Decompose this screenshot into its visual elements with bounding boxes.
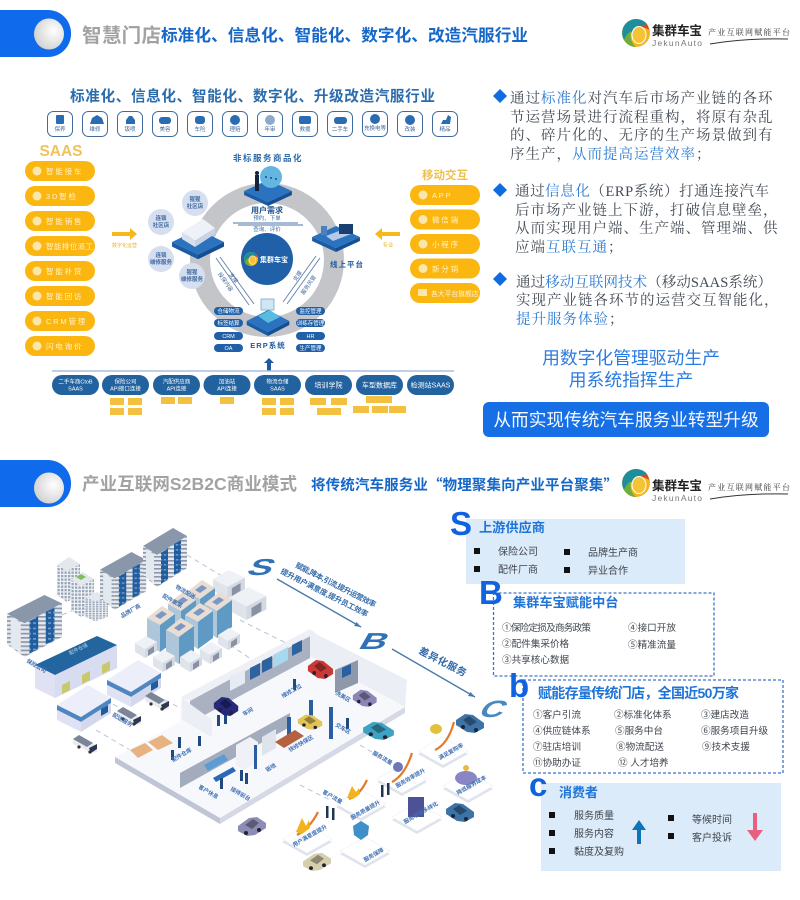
SAAS pills column: 智能销售 [46, 216, 83, 226]
SAAS pills column [25, 161, 95, 356]
ring diagram: 支撑 [227, 271, 240, 285]
panel: B empowerment platform [479, 574, 714, 676]
ring: ERP node [247, 299, 289, 350]
ring diagram [148, 153, 364, 352]
bullet: standardization: 的、碎片化的、无序的生产场景做到有 [510, 126, 774, 144]
ring: store node with community bubbles [148, 190, 224, 289]
panel: c consumers: 服务质量 [574, 809, 614, 822]
slogan: 用数字化管理驱动生产 [542, 348, 720, 368]
header 2: title: 产业互联网S2B2C商业模式 [82, 474, 298, 494]
bullet: mobile internet: 实现产业链各环节的运营交互智能化， [516, 291, 780, 309]
service icons row: 钣喷 [124, 125, 136, 133]
service icons row: 维修 [89, 125, 101, 133]
header 1: logo [622, 19, 790, 48]
illustration: isometric S2B2C scene: 满足复购率 [437, 741, 465, 762]
bullet: mobile internet: ； [609, 312, 624, 328]
panel: b existing stores: ⑫ 人才培养 [618, 757, 669, 769]
dashed flow lines [62, 555, 385, 800]
slogan [542, 348, 720, 390]
bullet: standardization: 序生产， [510, 146, 572, 163]
SAAS pills column: 智能回访 [46, 291, 83, 301]
bottom integration pills: 汽配供应商 [163, 378, 191, 386]
ring: store node with community bubbles: 社区店 [153, 221, 170, 229]
panel: S upstream suppliers: 品牌生产商 [588, 546, 638, 559]
panel: S upstream suppliers [450, 505, 685, 584]
ring diagram: 支撑 [291, 269, 304, 283]
ring diagram: 非标服务商品化 [233, 153, 303, 163]
service icons row: 精品 [439, 125, 451, 133]
iso labels: 维修工位 [280, 682, 303, 700]
iso labels: 服务流量 [371, 749, 394, 767]
iso labels: 保险公司 [25, 657, 48, 675]
panel: smart store diagram [25, 87, 480, 415]
warehouse: 配件仓储 [68, 642, 89, 657]
ring: ERP module pills: 标签结算 [217, 319, 240, 327]
ring: user demand node: 用户需求 [251, 205, 283, 215]
panel: b existing stores: b [509, 667, 529, 704]
bottom integration pills: 车型数据库 [362, 380, 397, 390]
arrow: SAAS to platform [112, 228, 137, 249]
panel: b existing stores: ⑪协助办证 [533, 757, 581, 769]
partner chips [110, 396, 406, 415]
panel: b existing stores: ⑦驻店培训 [533, 741, 581, 753]
panel: B empowerment platform: ④接口开放 [628, 622, 676, 634]
panel: b existing stores: ⑥服务项目升级 [701, 725, 769, 737]
arrow S to B: 赋能,降本,引流,提升运营效率 [294, 560, 378, 609]
header 2: logo [622, 469, 790, 503]
iso labels: 客户休息 [197, 783, 220, 801]
bottom integration pills [52, 375, 454, 395]
ring: ERP module pills [214, 307, 325, 352]
arrow B to C [392, 644, 475, 697]
header 2: blue tab icon [0, 460, 71, 507]
ring diagram: 服务风管 [299, 273, 318, 296]
panel: B empowerment platform: ①保险定损及商务政策 [502, 622, 591, 634]
service icons row: 车险 [194, 125, 206, 133]
ring: centre logo [241, 233, 293, 285]
illustration: isometric S2B2C scene: 用户满意度提升 [291, 822, 329, 849]
ring: store node with community bubbles: 连锁 [155, 251, 167, 259]
ring: ERP module pills: 生产管理 [299, 344, 322, 352]
ring: ERP module pills: HR [307, 334, 314, 340]
header 2: title [82, 474, 618, 495]
mobile pills column [410, 185, 480, 303]
towers: warehouse cluster [135, 580, 240, 672]
iso labels: 配送服务 [111, 711, 134, 729]
buildings: suppliers [7, 528, 266, 657]
panel: right explanation text [483, 89, 780, 437]
bottom integration pills: API接口连接 [110, 384, 141, 392]
panel: b existing stores: ①客户引流 [533, 709, 581, 721]
panel: B empowerment platform: B [479, 574, 503, 611]
bottom integration pills: API连接 [217, 384, 237, 392]
service icons row [48, 112, 458, 136]
icon: down arrow [747, 813, 763, 841]
mobile pills column: 微信端 [432, 214, 460, 224]
illustration: isometric S2B2C scene: 服务效率提升 [394, 766, 427, 790]
header 1: logo: JekunAuto [652, 38, 702, 48]
bullet: standardization [493, 89, 774, 163]
bullet: mobile internet: 通过移动互联网技术（移动SAAS系统） [516, 274, 773, 291]
illustration: isometric S2B2C scene: 服务保障 [362, 846, 385, 864]
iso labels: 洗美区 [334, 689, 353, 704]
bullet: informatization: 通过信息化（ERP系统）打通连接汽车 [515, 183, 770, 200]
diagram title: 标准化、信息化、智能化、数字化、升级改造汽服行业 [70, 87, 435, 105]
panel: b existing stores: ③建店改造 [701, 709, 749, 721]
S B C letters [242, 554, 513, 722]
panel: B empowerment platform: ③共享核心数据 [502, 654, 570, 666]
service icons row: 改装 [404, 125, 416, 133]
ring diagram: 投保内容 [216, 271, 236, 294]
trucks [73, 692, 169, 754]
mobile interaction heading: 移动交互 [422, 168, 468, 182]
bullet: informatization [493, 183, 778, 256]
illustration: isometric S2B2C scene: 服务项目多样化 [402, 799, 440, 826]
bullet: informatization: 从而实现用户端、生产端、管理端、供 [515, 220, 778, 237]
mobile pills column: APP [432, 191, 452, 200]
ring: user demand node: 预约、下单 [253, 214, 281, 222]
header 2: logo: 产业互联网赋能平台 [708, 482, 790, 493]
iso labels: 品牌厂商 [119, 602, 142, 620]
illustration: isometric S2B2C scene [7, 528, 513, 871]
iso labels: 接待前台 [229, 785, 252, 803]
panel: c consumers [529, 766, 781, 871]
S B C letters: S [242, 554, 282, 580]
mobile pills column: 小程序 [432, 239, 460, 249]
arrow: mobile to platform [375, 228, 400, 249]
iso labels: 客户流量 [321, 788, 344, 806]
ring: ERP node: ERP系统 [250, 340, 286, 350]
arrow: mobile to platform: 专业 [382, 241, 394, 249]
ring: centre logo: 集群车宝 [260, 255, 288, 264]
panel: b existing stores: 赋能存量传统门店，全国近50万家 [538, 685, 739, 701]
mobile pills column: 各大平台旗舰店 [431, 289, 479, 298]
stores [57, 660, 161, 732]
ring: ERP module pills: 训练存管理 [297, 319, 325, 327]
service icons row: 二手车 [332, 125, 349, 133]
panel: b existing stores: ②标准化体系 [614, 709, 672, 721]
header 1: logo: 集群车宝 [652, 23, 702, 38]
arrow: SAAS to platform: 数字化运营 [112, 242, 137, 249]
SAAS pills column: 3D智检 [46, 191, 78, 201]
panel: c consumers: c [529, 766, 547, 803]
header 2: title: 将传统汽车服务业“物理聚集向产业平台聚集” [311, 474, 618, 495]
panel: S upstream suppliers: S [450, 505, 472, 542]
ring: online platform node: 线上平台 [330, 259, 364, 269]
arrow S to B: 提升用户满意度,提升员工效率 [279, 566, 371, 619]
SAAS pills column: 智能补货 [46, 266, 83, 276]
bullet: standardization: 标准化对汽车后市场产业链的各环 [541, 91, 774, 107]
panel: B empowerment platform: ⑤精准流量 [628, 639, 676, 651]
ring: user demand node [233, 166, 303, 233]
SAAS pills column: 闪电询价 [46, 341, 83, 351]
icon: up arrow [632, 820, 646, 844]
panel: S upstream suppliers: 异业合作 [588, 564, 628, 577]
arrow: bottom bar up to ERP [264, 358, 274, 371]
header 1: title: 标准化、信息化、智能化、数字化、改造汽服行业 [161, 25, 528, 45]
ring: store node with community bubbles: 猩猩 [186, 268, 198, 276]
SAAS pills column: CRM管理 [46, 316, 87, 326]
ring: ERP module pills: 仓储物流 [217, 307, 240, 315]
panel: b existing stores: ④供应链体系 [533, 725, 591, 737]
header 2: logo: 集群车宝 [652, 478, 702, 493]
panel: b existing stores: ⑧物流配送 [616, 741, 664, 753]
panel: B empowerment platform: ②配件集采价格 [502, 638, 570, 650]
SAAS heading: SAAS [39, 143, 83, 160]
arrow S to B [277, 560, 378, 627]
ring: ERP module pills: CRM [222, 334, 235, 340]
panel: c consumers: 客户投诉 [692, 831, 732, 844]
SAAS pills column: 智能排位派工 [46, 241, 93, 251]
SAAS pills column: 智能接车 [46, 166, 83, 176]
S B C letters: C [474, 696, 513, 722]
workshop floor [115, 629, 407, 824]
panel: c consumers: 等候时间 [692, 813, 732, 826]
arrow B to C: 差异化服务 [417, 644, 469, 679]
bottom integration pills: SAAS [68, 386, 83, 392]
iso labels: 物流配送 [174, 583, 197, 601]
bottom integration pills: 培训学院 [314, 380, 342, 390]
ring: store node with community bubbles: 维修服务 [150, 258, 172, 266]
iso labels [25, 583, 394, 806]
ring: store node with community bubbles: 连锁 [155, 214, 167, 222]
ring: support lines [216, 256, 320, 305]
panel: S upstream suppliers: 保险公司 [498, 545, 538, 558]
mobile pills column: 新分销 [432, 264, 460, 274]
illustration: isometric S2B2C scene: 降低服务成本 [455, 773, 488, 797]
iso labels: 配件仓库 [170, 746, 193, 764]
ring: store node with community bubbles: 猩猩 [189, 195, 201, 203]
service icons row: 理赔 [229, 125, 241, 133]
bullet: mobile internet: 提升服务体验 [516, 310, 609, 328]
service icons row: 美容 [159, 125, 171, 133]
ring: store node with community bubbles: 维修服务 [181, 275, 203, 283]
conclusion button: 从而实现传统汽车服务业转型升级 [493, 410, 759, 430]
bottom integration pills: 二手车商CtoB [58, 378, 93, 386]
conclusion button [483, 402, 769, 437]
bullet: mobile internet [493, 272, 780, 328]
bottom integration pills: API连接 [167, 384, 187, 392]
warehouse [35, 636, 117, 698]
bullet: informatization: 应端 [515, 239, 546, 256]
service icons row: 救援 [299, 125, 311, 133]
iso labels: 钣喷 [264, 761, 278, 774]
illustration: isometric S2B2C scene: 服务质量提升 [349, 798, 382, 822]
ring: user demand node: 查询、评价 [253, 225, 281, 233]
iso labels: 快修快保区 [287, 733, 315, 754]
header 1: title [82, 24, 528, 47]
panel: c consumers: 服务内容 [574, 827, 614, 840]
service cards [282, 722, 493, 868]
panel: c consumers: 消费者 [559, 785, 598, 800]
panel: S upstream suppliers: 配件厂商 [498, 563, 538, 576]
panel: b existing stores: ⑨技术支援 [702, 741, 750, 753]
panel: S upstream suppliers: 上游供应商 [479, 519, 545, 535]
bottom integration pills: 检测站SAAS [411, 380, 451, 390]
bullet: informatization: 互联互通； [546, 240, 624, 256]
panel: b existing stores [509, 667, 783, 773]
iso labels: 交车区 [334, 721, 353, 736]
header 2: logo: JekunAuto [652, 493, 702, 503]
header 1: blue tab icon [0, 10, 71, 57]
bottom integration pills: 物流仓储 [266, 378, 289, 386]
cars [214, 660, 484, 871]
slogan: 用系统指挥生产 [569, 370, 693, 390]
header 1: title: 智慧门店 [82, 24, 161, 47]
bullet: standardization: 通过 [510, 90, 541, 107]
panel: B empowerment platform: 集群车宝赋能中台 [513, 594, 618, 610]
bullet: standardization: 节运营场景进行流程重构，将原有杂乱 [510, 108, 774, 126]
panel: c consumers: 黏度及复购 [574, 845, 624, 858]
bullet: informatization: 后市场产业链上下游，打破信息壁垒， [515, 202, 778, 219]
bottom integration pills: 加油站 [219, 378, 236, 386]
panel: b existing stores: ⑤服务中台 [615, 725, 663, 737]
header 1: logo: 产业互联网赋能平台 [708, 27, 790, 38]
ring: ERP module pills: 监控管理 [299, 307, 322, 315]
bullet: standardization: 从而提高运营效率； [572, 147, 712, 163]
service icons row: 保养 [54, 125, 66, 133]
ring: online platform node [312, 224, 364, 269]
iso labels: 配件集采 [161, 592, 184, 610]
bottom integration pills: SAAS [270, 386, 285, 392]
ring: store node with community bubbles: 社区店 [187, 202, 204, 210]
ring: ERP module pills: OA [225, 346, 233, 352]
iso labels: 车间 [241, 705, 255, 718]
service icons row: 年审 [264, 125, 276, 133]
bottom integration pills: 保险公司 [114, 378, 137, 386]
service icons row: 充换电等 [364, 124, 386, 132]
S B C letters: B [354, 628, 396, 654]
